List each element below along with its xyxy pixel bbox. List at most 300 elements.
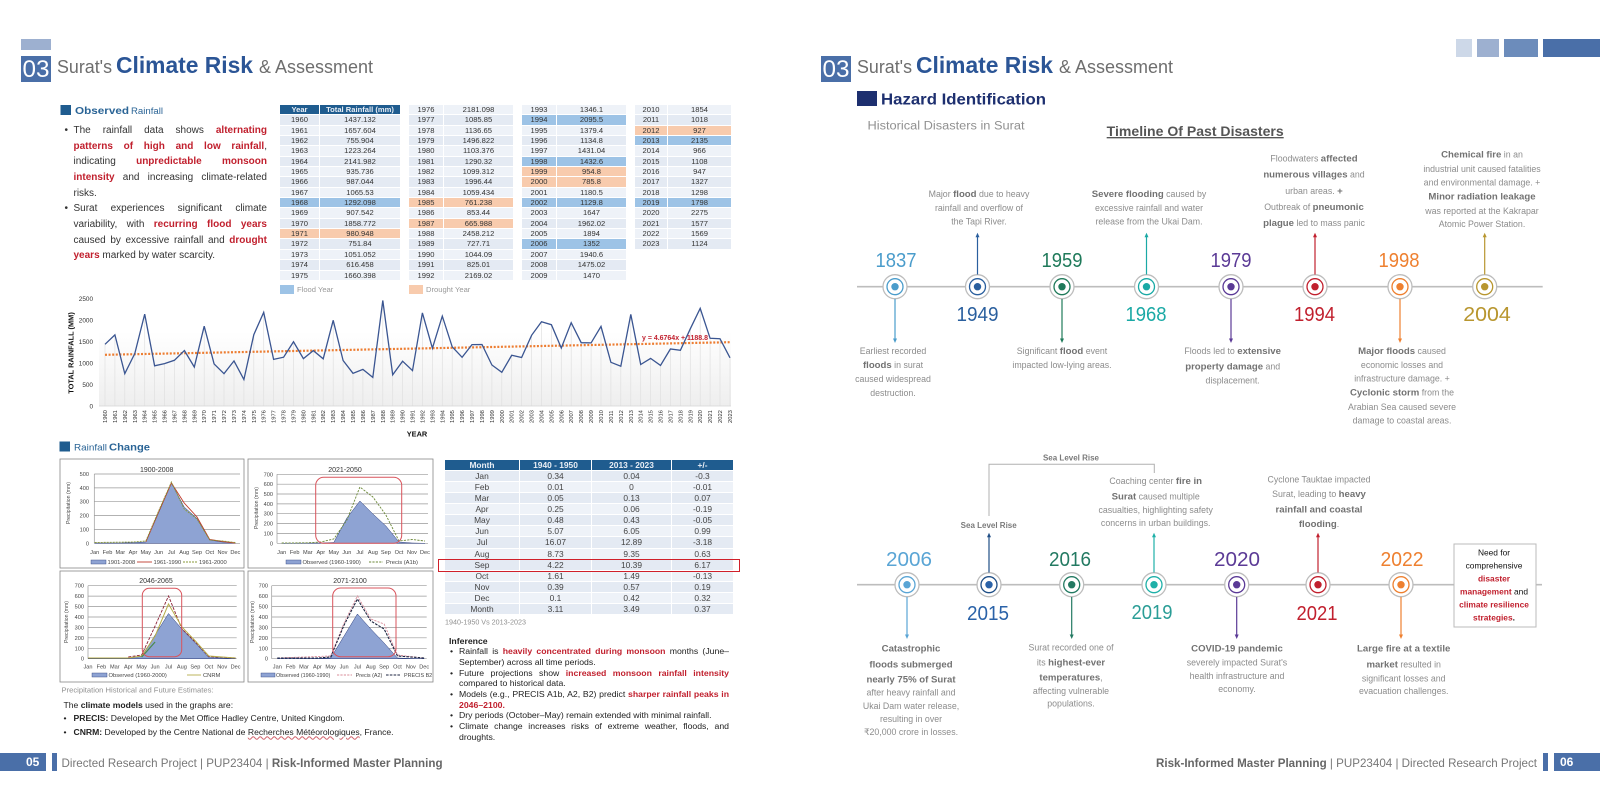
x axis year labels: 1991 — [410, 410, 416, 423]
event 2020 — [1187, 549, 1288, 694]
chart: precipitation 2046-2065 — [60, 571, 244, 682]
rainfall table 1960-1975: 1065.53 — [346, 188, 374, 197]
rainfall table 1976-1992: 1978 — [418, 126, 434, 135]
event 1959: 1959 — [1042, 250, 1082, 272]
x axis year labels: 1997 — [470, 410, 476, 423]
x axis year labels: 2023 — [728, 410, 734, 423]
event 2020: 2020 — [1214, 549, 1260, 571]
left footer — [0, 753, 443, 771]
chart: precipitation 2071-2100: 100 — [259, 646, 268, 652]
rainfall table 1960-1975: 1858.772 — [344, 219, 376, 228]
monthly rainfall comparison table: 0.1 — [550, 593, 561, 603]
chart: precipitation 2071-2100: 300 — [259, 625, 268, 631]
left page header accent block — [21, 39, 51, 50]
monthly rainfall comparison table: Nov — [475, 582, 489, 592]
monthly rainfall comparison table: 0.04 — [623, 471, 640, 481]
chart: precipitation 1900-2008: Dec — [230, 550, 240, 556]
x axis year labels: 1992 — [420, 410, 426, 423]
event 2006: 2006 — [886, 549, 932, 571]
observed rainfall text — [64, 125, 267, 261]
x axis year labels: 1963 — [133, 410, 139, 423]
text: • — [450, 668, 453, 678]
event 1994: numerous villages and — [1263, 169, 1365, 180]
chart: precipitation 2071-2100: Dec — [419, 664, 429, 670]
chart: precipitation 2021-2050: Mar — [303, 550, 313, 556]
x axis year labels: 1986 — [361, 410, 367, 423]
event 1968 — [1092, 189, 1207, 326]
rainfall table 2010-2023: 1298 — [691, 188, 708, 197]
rainfall table 1960-1975: 1292.098 — [344, 198, 376, 207]
chart: precipitation 2021-2050: Dec — [420, 550, 430, 556]
rainfall table 1976-1992 — [409, 105, 513, 280]
event 2004: Minor radiation leakage — [1428, 192, 1536, 203]
chart: precipitation 2021-2050: 400 — [264, 502, 273, 508]
right page section number: 03 — [822, 56, 850, 83]
event 1837 — [855, 250, 931, 398]
monthly rainfall comparison table: -0.01 — [693, 482, 712, 492]
rainfall table 2010-2023: 2011 — [643, 115, 659, 124]
monthly rainfall comparison table: May — [474, 515, 490, 525]
rainfall table 1976-1992: 1136.65 — [465, 126, 492, 135]
x axis year labels: 1969 — [192, 410, 198, 423]
rainfall table 1960-1975: 1975 — [291, 270, 308, 280]
legend: drought year: Drought Year — [426, 285, 471, 294]
rainfall table 1976-1992: 2169.02 — [465, 270, 492, 280]
monthly rainfall comparison table: 10.39 — [621, 560, 642, 570]
event 1998: damage to coastal areas. — [1353, 415, 1451, 425]
x axis year labels: 2017 — [668, 410, 674, 423]
event 1994 — [1263, 153, 1366, 326]
chart: precipitation 2046-2065: 300 — [75, 625, 84, 631]
monthly rainfall comparison table: 16.07 — [545, 537, 566, 547]
monthly rainfall comparison table: 1940 - 1950 — [533, 460, 578, 470]
rainfall table 1960-1975: 755.904 — [346, 136, 374, 145]
heading: observed rainfall — [60, 105, 163, 117]
monthly rainfall comparison table: 5.07 — [547, 526, 564, 536]
monthly rainfall comparison table: Jan — [475, 471, 489, 481]
chart: precipitation 2046-2065: Apr — [124, 664, 133, 670]
rainfall table 2010-2023: 2018 — [643, 188, 659, 197]
x axis year labels: 1983 — [331, 410, 337, 423]
x axis year labels: 1984 — [341, 409, 347, 423]
heading: timeline of past disasters: Timeline Of Past Disasters — [1107, 124, 1284, 139]
event 2021: 2021 — [1296, 603, 1338, 625]
rainfall table 1976-1992: 2458.212 — [463, 229, 494, 238]
rainfall table 1976-1992: 1991 — [418, 260, 434, 269]
monthly rainfall comparison table: Mar — [475, 493, 489, 503]
heading: rainfall change — [60, 442, 150, 454]
event 1837: caused widespread — [855, 374, 931, 384]
rainfall table 1976-1992: 1986 — [418, 208, 434, 217]
chart: precipitation 2071-2100: Mar — [299, 664, 309, 670]
rainfall table 2010-2023: 1108 — [691, 157, 708, 166]
monthly rainfall comparison table: -0.05 — [693, 515, 712, 525]
chart: precipitation 2021-2050: Aug — [368, 550, 378, 556]
monthly rainfall comparison table: Month — [470, 604, 494, 614]
heading: observed rainfall: Observed — [75, 105, 129, 117]
chart: precipitation 2071-2100: Nov — [406, 664, 416, 670]
event 2019: concerns in urban buildings. — [1101, 518, 1210, 528]
rainfall table 1993-2009: 1940.6 — [580, 250, 603, 259]
x axis year labels: 2011 — [609, 411, 615, 423]
observed rainfall text: risks. — [74, 188, 97, 199]
x axis year labels: 2004 — [540, 409, 546, 423]
heading: observed rainfall: Rainfall — [131, 106, 163, 116]
rainfall table 1960-1975: Total Rainfall (mm) — [326, 105, 394, 114]
event 2004 — [1423, 150, 1541, 326]
event 2016: its highest-ever — [1037, 657, 1105, 668]
chart: precipitation 2021-2050: Jul — [356, 550, 363, 556]
inference block — [449, 636, 729, 742]
monthly rainfall comparison table: 3.49 — [623, 604, 640, 614]
x axis year labels: 2013 — [629, 410, 635, 423]
chart: precipitation 2021-2050: Sep — [381, 550, 391, 556]
monthly rainfall comparison table: 0.63 — [694, 548, 711, 558]
rainfall table 2010-2023: 2019 — [643, 198, 659, 207]
event 2022: Large fire at a textile — [1357, 644, 1450, 655]
rainfall table 1960-1975: 935.736 — [346, 167, 374, 176]
rainfall table 1960-1975: 1974 — [291, 260, 308, 269]
monthly rainfall comparison table: 0.32 — [694, 593, 711, 603]
event 2006: Ukai Dam water release, — [863, 701, 959, 711]
chart: precipitation 2071-2100: Apr — [313, 664, 322, 670]
monthly rainfall comparison table: 0.99 — [694, 526, 711, 536]
text: • — [450, 721, 453, 731]
chart: precipitation 2046-2065: Oct — [204, 664, 214, 670]
x axis year labels: 1973 — [232, 410, 238, 423]
left page title: Climate Risk — [116, 52, 254, 78]
monthly rainfall comparison table: 0.34 — [547, 471, 564, 481]
text: • — [64, 125, 68, 136]
chart: precipitation 2046-2065: May — [136, 664, 147, 670]
event 2004: Chemical fire in an — [1441, 150, 1523, 161]
rainfall table 2010-2023 — [635, 105, 731, 249]
monthly rainfall comparison table: Aug — [475, 548, 489, 558]
y axis labels: 0 — [89, 403, 93, 410]
callout: need for disaster management: comprehensive — [1466, 561, 1523, 571]
rainfall table 1976-1992: 853.44 — [467, 208, 490, 217]
inference block: September) across all time periods. — [459, 657, 596, 667]
chart: precipitation 2021-2050: May — [329, 550, 339, 556]
right footer: Risk-Informed Master Planning | PUP23404 | Directed Research Project — [1156, 757, 1538, 770]
event 1837: floods in surat — [863, 360, 924, 371]
rainfall table 1976-1992: 825.01 — [467, 260, 490, 269]
x axis year labels: 2010 — [599, 410, 605, 423]
y axis labels: 1500 — [79, 339, 93, 346]
x axis year labels: 1990 — [401, 410, 407, 423]
event 2019 — [1098, 476, 1214, 624]
event 2021: flooding. — [1299, 519, 1339, 530]
climate models note: PRECIS: Developed by the Met Office Hadley Centre, United Kingdom. — [74, 713, 345, 723]
event 2016: Surat recorded one of — [1028, 642, 1114, 652]
rainfall table 1960-1975: 1972 — [291, 239, 308, 248]
x axis year labels: 1968 — [182, 410, 188, 423]
event 2019: Surat caused multiple — [1112, 491, 1200, 502]
event 2020: severely impacted Surat's — [1187, 658, 1288, 668]
event 1949 — [929, 189, 1030, 326]
legend: flood year: Flood Year — [297, 285, 334, 294]
rainfall table 2010-2023: 2012 — [643, 126, 659, 135]
inference block: Models (e.g., PRECIS A1b, A2, B2) predict sharper rainfall peaks in — [459, 689, 729, 699]
callout: need for disaster management: disaster — [1478, 574, 1511, 584]
rainfall table 1993-2009: 2007 — [531, 250, 547, 259]
rainfall table 2010-2023: 1854 — [691, 105, 708, 114]
event 2004: was reported at the Kakrapar — [1424, 206, 1539, 216]
rainfall table 1993-2009: 1993 — [531, 105, 547, 114]
event 1979: displacement. — [1206, 376, 1260, 386]
chart: precipitation 2021-2050: 100 — [264, 531, 273, 537]
rainfall table 1993-2009: 1379.4 — [580, 126, 603, 135]
rainfall table 1993-2009: 2002 — [531, 198, 547, 207]
observed rainfall text: indicating unpredictable monsoon — [74, 156, 267, 167]
x axis year labels: 2018 — [678, 410, 684, 423]
event 1998: 1998 — [1378, 250, 1420, 272]
x axis year labels: 1989 — [391, 410, 397, 423]
chart: precipitation 2046-2065: 100 — [75, 646, 84, 652]
event 2016 — [1028, 549, 1114, 709]
event 2016: 2016 — [1049, 549, 1091, 571]
rainfall table 1976-1992: 1059.434 — [463, 188, 494, 197]
event 2022: 2022 — [1380, 549, 1424, 571]
event 1959: impacted low-lying areas. — [1012, 360, 1112, 370]
climate models note: CNRM: Developed by the Centre National de Recherches Météorologiques, France. — [74, 727, 394, 737]
event 2019: casualties, highlighting safety — [1098, 505, 1214, 515]
monthly rainfall comparison table: 0.42 — [623, 593, 640, 603]
callout: need for disaster management: management and — [1460, 587, 1528, 597]
monthly rainfall comparison table: Apr — [475, 504, 489, 514]
rainfall table 1993-2009: 954.8 — [582, 167, 601, 176]
chart: precipitation 2021-2050: 300 — [264, 512, 273, 518]
rainfall table 1976-1992: 1988 — [418, 229, 434, 238]
sea level rise connector: Sea Level Rise — [961, 521, 1017, 530]
September highlight box — [438, 559, 740, 572]
chart: precipitation 2046-2065: Aug — [177, 664, 187, 670]
x axis year labels: 1994 — [440, 409, 446, 423]
observed rainfall text: The rainfall data shows alternating — [74, 125, 267, 136]
event 1968: excessive rainfall and water — [1095, 203, 1203, 213]
rainfall table 1960-1975: 1973 — [291, 250, 308, 259]
x axis year labels: 1975 — [252, 410, 258, 423]
chart: precipitation 1900-2008: Jan — [90, 550, 99, 556]
rainfall table 2010-2023: 966 — [693, 146, 706, 155]
rainfall table 2010-2023: 2010 — [643, 105, 659, 114]
event 2022 — [1357, 549, 1450, 696]
left page title: & Assessment — [259, 56, 373, 77]
event 1959: Significant flood event — [1017, 346, 1108, 357]
event 2016: affecting vulnerable — [1033, 686, 1109, 696]
rainfall table 1976-1992: 761.238 — [465, 198, 492, 207]
chart: precipitation 1900-2008: May — [141, 550, 151, 556]
chart: precipitation 2071-2100: 600 — [259, 594, 268, 600]
timeline axis 2 — [857, 584, 1542, 586]
inference block: Dry periods (October–May) remain extended with minimal rainfall. — [459, 710, 712, 720]
event 1837: destruction. — [870, 388, 916, 398]
inference block: Inference — [449, 636, 488, 646]
event 1979 — [1184, 250, 1281, 386]
monthly rainfall comparison table: 0.06 — [623, 504, 640, 514]
chart: precipitation 1900-2008: Precipitation (mm) — [66, 482, 72, 524]
event 1968: release from the Ukai Dam. — [1095, 216, 1203, 226]
x axis year labels: 1967 — [172, 410, 178, 423]
rainfall table 1960-1975: 1964 — [291, 157, 308, 166]
climate models note — [64, 700, 394, 740]
event 1994: Outbreak of pneumonic — [1264, 202, 1364, 213]
event 1994: plague led to mass panic — [1263, 218, 1366, 229]
chart: precipitation 2046-2065: Precipitation (mm) — [64, 601, 70, 643]
monthly rainfall comparison table: Sep — [475, 560, 489, 570]
rainfall table 1993-2009: 785.8 — [582, 177, 601, 186]
monthly rainfall comparison table: 0.39 — [547, 582, 564, 592]
rainfall table 1993-2009: 1647 — [583, 208, 600, 217]
rainfall table 2010-2023: 1124 — [691, 239, 708, 248]
chart: precipitation 1900-2008: Sep — [192, 550, 202, 556]
chart: precipitation 2021-2050: Oct — [395, 550, 404, 556]
x axis year labels: 1970 — [202, 410, 208, 423]
rainfall table 1976-1992: 1977 — [418, 115, 434, 124]
x axis year labels: 1978 — [282, 410, 288, 423]
chart: precipitation 1900-2008: 500 — [80, 472, 89, 478]
rainfall table 1960-1975: 1657.604 — [344, 126, 376, 135]
rainfall table 1976-1992: 1290.32 — [465, 157, 492, 166]
monthly rainfall comparison table: Jun — [475, 526, 489, 536]
heading: hazard identification: Hazard Identification — [881, 92, 1046, 108]
rainfall table 1993-2009: 1180.5 — [580, 188, 603, 197]
rainfall table 1960-1975: 1967 — [291, 188, 308, 197]
inference block: Rainfall is heavily concentrated during monsoon months (June– — [459, 646, 729, 656]
event 2021 — [1267, 474, 1371, 625]
rainfall table 1993-2009: 1475.02 — [578, 260, 605, 269]
x axis year labels: 2007 — [569, 410, 575, 423]
rainfall table 1960-1975: 987.044 — [346, 177, 374, 186]
rainfall table 1993-2009: 1999 — [531, 167, 547, 176]
rainfall table 1976-1992: 1980 — [418, 146, 434, 155]
event 2020: health infrastructure and — [1190, 671, 1285, 681]
event 2021: Surat, leading to heavy — [1272, 489, 1367, 500]
chart: precipitation 1900-2008 — [60, 459, 244, 568]
event 2004: industrial unit caused fatalities — [1423, 164, 1541, 174]
event 1949: rainfall and overflow of — [935, 203, 1024, 213]
rainfall table 1976-1992: 1992 — [418, 270, 434, 280]
monthly rainfall comparison table: -0.19 — [693, 504, 712, 514]
sea level rise connector — [961, 454, 1154, 530]
chart: precipitation 1900-2008: 400 — [80, 486, 89, 492]
right page header squares — [1456, 39, 1600, 57]
rainfall table 1960-1975 — [280, 105, 400, 280]
x axis year labels: 1966 — [162, 410, 168, 423]
chart: precipitation 2046-2065: 500 — [75, 605, 84, 611]
rainfall table 1993-2009: 2008 — [531, 260, 547, 269]
x axis year labels: 1981 — [311, 410, 317, 423]
chart: precipitation 2021-2050: Precis (A1b) — [386, 560, 418, 566]
chart: precipitation 2071-2100: Feb — [286, 664, 296, 670]
climate models note: • — [64, 727, 67, 737]
monthly rainfall comparison table: 0.05 — [547, 493, 564, 503]
chart: precipitation 2071-2100: 400 — [259, 615, 268, 621]
chart: precipitation 2071-2100: 0 — [265, 657, 268, 663]
rainfall table 1993-2009: 1995 — [531, 126, 547, 135]
event 2015 — [967, 533, 1009, 625]
rainfall table 1976-1992: 1982 — [418, 167, 434, 176]
text: • — [64, 203, 68, 214]
monthly rainfall comparison table: Month — [469, 460, 495, 470]
event 2021: rainfall and coastal — [1276, 504, 1362, 515]
x axis year labels: 1965 — [153, 410, 159, 423]
rainfall table 1993-2009: 1346.1 — [580, 105, 603, 114]
callout: need for disaster management: climate resilience — [1459, 599, 1529, 609]
text: • — [450, 646, 453, 656]
monthly rainfall comparison table: Dec — [475, 593, 489, 603]
event 2006 — [863, 549, 959, 737]
monthly rainfall comparison table: 2013 - 2023 — [609, 460, 654, 470]
x axis year labels: 2002 — [520, 410, 526, 423]
trend line — [105, 342, 730, 355]
right footer: 06 — [1560, 755, 1574, 769]
rainfall table 1960-1975: 1960 — [291, 115, 308, 124]
rainfall table 1993-2009: 2000 — [531, 177, 547, 186]
rainfall table 2010-2023: 2275 — [691, 208, 708, 217]
x axis year labels: 2000 — [500, 410, 506, 423]
chart: precipitation 2021-2050: 500 — [264, 492, 273, 498]
chart: precipitation 1900-2008: Nov — [218, 550, 228, 556]
event 1979: property damage and — [1185, 362, 1280, 373]
chart: precipitation 2021-2050: Jan — [277, 550, 286, 556]
monthly rainfall comparison table: 0.37 — [694, 604, 711, 614]
x axis title: YEAR — [407, 430, 428, 438]
chart: precipitation 2046-2065: Nov — [217, 664, 227, 670]
x axis year labels: 1995 — [450, 410, 456, 423]
climate models note: The climate models used in the graphs are: — [64, 700, 233, 710]
rainfall table 1993-2009: 1432.6 — [580, 157, 603, 166]
x axis year labels: 2012 — [619, 410, 625, 423]
rainfall table 1976-1992: 1976 — [418, 105, 434, 114]
rainfall table 1976-1992: 1044.09 — [465, 250, 492, 259]
event 2004: 2004 — [1463, 304, 1511, 326]
event 1998: infrastructure damage. + — [1354, 373, 1450, 383]
inference block: Future projections show increased monsoon rainfall intensity — [459, 668, 729, 678]
x axis year labels: 2008 — [579, 410, 585, 423]
chart: precipitation 2071-2100: Precipitation (mm) — [250, 601, 256, 643]
chart: precipitation 2046-2065: Sep — [190, 664, 200, 670]
rainfall table 2010-2023: 2021 — [643, 219, 659, 228]
rainfall table 1993-2009: 1894 — [583, 229, 600, 238]
rainfall table 1960-1975: 1969 — [291, 208, 308, 217]
rainfall table 1993-2009: 1352 — [583, 239, 600, 248]
monthly rainfall comparison table: 1.49 — [623, 571, 640, 581]
rainfall table 1976-1992: 1987 — [418, 219, 434, 228]
rainfall table 1976-1992: 727.71 — [467, 239, 490, 248]
event 2019: Coaching center fire in — [1109, 476, 1202, 487]
inference block: compared to historical data. — [459, 678, 566, 688]
chart: precipitation 2046-2065: 2046-2065 — [139, 578, 173, 585]
x axis year labels: 1985 — [351, 410, 357, 423]
rainfall table 1960-1975: 1968 — [291, 198, 308, 207]
rainfall table 2010-2023: 2015 — [643, 157, 659, 166]
chart: precipitation 2071-2100: 200 — [259, 636, 268, 642]
rainfall table 1976-1992: 665.988 — [465, 219, 492, 228]
chart: precipitation 2021-2050: Precipitation (mm) — [254, 487, 260, 529]
event 1959 — [1012, 250, 1112, 370]
rainfall table 2010-2023: 2014 — [643, 146, 659, 155]
chart: precipitation 2046-2065: CNRM — [203, 673, 221, 679]
chart: precipitation 2071-2100: Aug — [366, 664, 376, 670]
chart: precipitation 2071-2100: 2071-2100 — [333, 578, 367, 585]
monthly rainfall comparison table: 0.07 — [694, 493, 711, 503]
heading: rainfall change: Rainfall — [74, 442, 107, 452]
rainfall table 2010-2023: 1327 — [691, 177, 708, 186]
x axis year labels: 1996 — [460, 410, 466, 423]
rainfall table 1993-2009: 1962.02 — [578, 219, 605, 228]
rainfall table 1960-1975: 1223.264 — [344, 146, 376, 155]
